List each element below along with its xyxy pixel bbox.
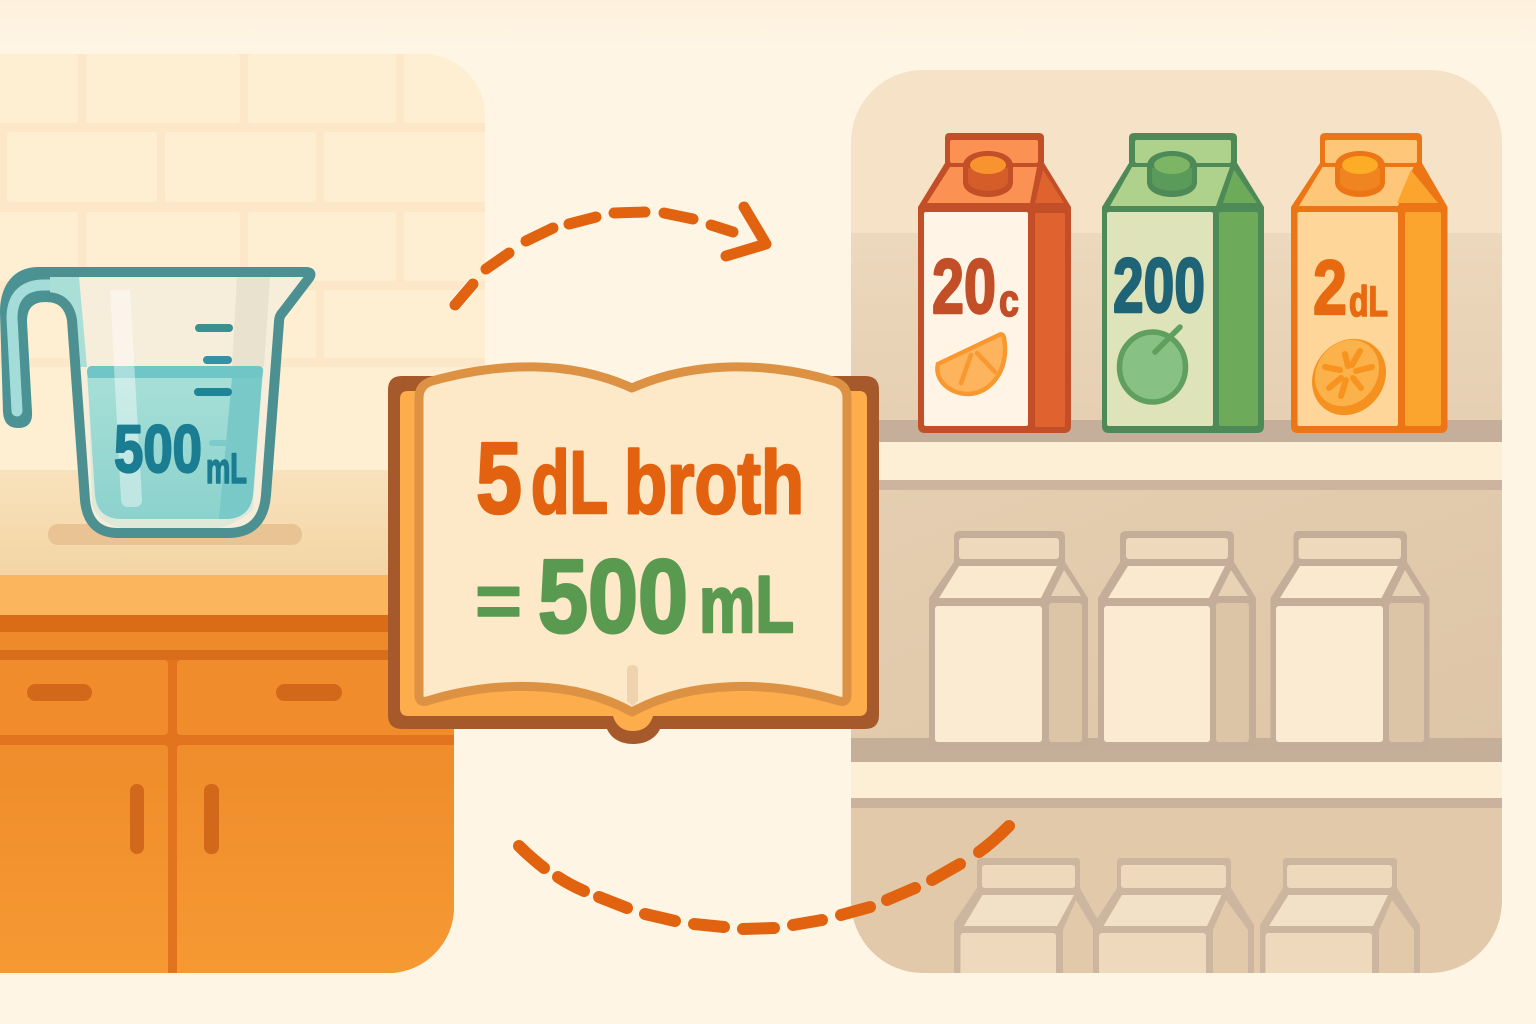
brick wall	[0, 54, 494, 477]
label: 2dL: dL	[1349, 278, 1388, 326]
carton row 2	[929, 531, 1430, 750]
drawer handles	[27, 684, 342, 854]
label: 2dL	[1313, 245, 1388, 331]
jug label: 500 mL: mL	[206, 445, 247, 493]
blank carton 8	[1093, 858, 1254, 983]
panel: store shelves	[851, 70, 1502, 983]
label: 2dL: 2	[1313, 245, 1347, 331]
icon: orange half	[1297, 324, 1401, 430]
jug label: 500 mL: 500	[114, 412, 202, 487]
measurement ticks	[194, 324, 233, 446]
water	[87, 366, 263, 519]
heading: 5 dL broth: 5	[476, 423, 522, 535]
book cover	[388, 376, 879, 744]
label: 20c: c	[999, 275, 1019, 326]
arrowhead	[726, 207, 766, 256]
countertop	[0, 470, 388, 615]
arrow: dashed top arc jug to shelf	[455, 207, 766, 305]
blank carton 4	[929, 531, 1088, 750]
label: 20c: 20	[932, 244, 996, 330]
blank carton 9	[1260, 858, 1420, 983]
carton: 200 green	[1102, 133, 1264, 433]
carton: 2dL orange	[1291, 133, 1448, 433]
label: 200: 200	[1113, 243, 1205, 329]
jug outline	[38, 272, 310, 533]
carton cap	[963, 151, 1013, 197]
icon: measuring jug with 500 mL	[0, 267, 310, 533]
heading: = 500 mL: mL	[699, 560, 794, 650]
icon: lime	[1120, 327, 1186, 402]
heading: = 500 mL: 500	[538, 539, 688, 655]
highlight	[110, 290, 142, 507]
cabinet	[0, 615, 485, 985]
carton: 20c orange-red	[918, 133, 1071, 433]
arrow: dashed bottom arc shelf to jug	[519, 826, 1009, 929]
heading: = 500 mL	[475, 539, 794, 655]
icon: orange slice	[937, 334, 1005, 394]
heading: 5 dL broth: broth	[624, 432, 804, 532]
book pages	[419, 367, 847, 712]
blank carton 6	[1270, 531, 1430, 750]
blank carton 7	[954, 858, 1099, 983]
carton cap	[1147, 151, 1197, 197]
carton cap	[1335, 151, 1385, 197]
blank carton 5	[1098, 531, 1256, 750]
jug handle	[0, 267, 90, 428]
book spine mark	[627, 665, 638, 706]
book: recipe card	[388, 367, 879, 744]
jug glass	[60, 272, 310, 533]
panel: kitchen	[0, 54, 494, 985]
heading: = 500 mL: =	[475, 559, 522, 644]
heading: 5 dL broth	[476, 423, 804, 535]
jug shadow	[48, 524, 302, 545]
carton row 3	[954, 858, 1420, 983]
heading: 5 dL broth: dL	[531, 432, 608, 532]
